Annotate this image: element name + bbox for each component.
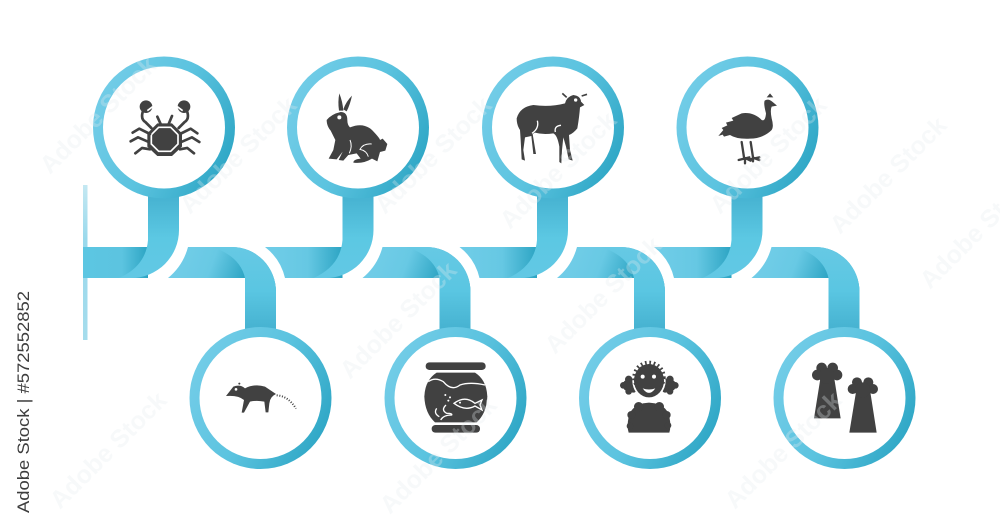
watermark: repeated faint stock text: Adobe Stock [539, 231, 667, 359]
circle: crab [93, 56, 235, 198]
watermark: repeated faint stock text: Adobe Stock [704, 91, 832, 219]
watermark: repeated faint stock text: Adobe Stock [369, 91, 497, 219]
left vertical bar [83, 185, 88, 340]
icon: rabbit [327, 93, 387, 163]
circle: poodle [579, 327, 721, 469]
watermark: repeated faint stock text: Adobe Stock [374, 391, 502, 519]
circle: emu [676, 56, 818, 198]
icon: fish bowl [424, 362, 487, 433]
watermark: repeated faint stock text: Adobe Stock [34, 51, 162, 179]
watermark: repeated faint stock text: Adobe Stock [44, 386, 172, 514]
circle: fish bowl [384, 327, 526, 469]
watermark: repeated faint stock text: Adobe Stock [824, 111, 952, 239]
ribbon connector: rabbit to fish bowl [265, 190, 470, 335]
icon: paws [812, 363, 878, 433]
watermark: repeated faint stock text: Adobe Stock [494, 106, 622, 234]
ribbon connector: sheep to poodle [460, 190, 665, 335]
circle: paws [774, 327, 916, 469]
icon: poodle [620, 362, 679, 433]
circle: shrew [190, 327, 332, 469]
icon: crab [131, 100, 199, 156]
icon: emu [718, 93, 777, 163]
ribbon connector: crab to shrew [83, 190, 276, 335]
circle: rabbit [287, 56, 429, 198]
icon: sheep [517, 93, 587, 163]
stock id caption: Adobe Stock | #572552852 [14, 291, 33, 513]
icon: shrew [226, 383, 296, 413]
ribbon connector: emu to paws [654, 190, 860, 335]
watermark: repeated faint stock text: Adobe Stock [719, 386, 847, 514]
watermark: repeated faint stock text: Adobe Stock [174, 91, 302, 219]
watermark: repeated faint stock text: Adobe Stock [334, 256, 462, 384]
circle: sheep [482, 56, 624, 198]
